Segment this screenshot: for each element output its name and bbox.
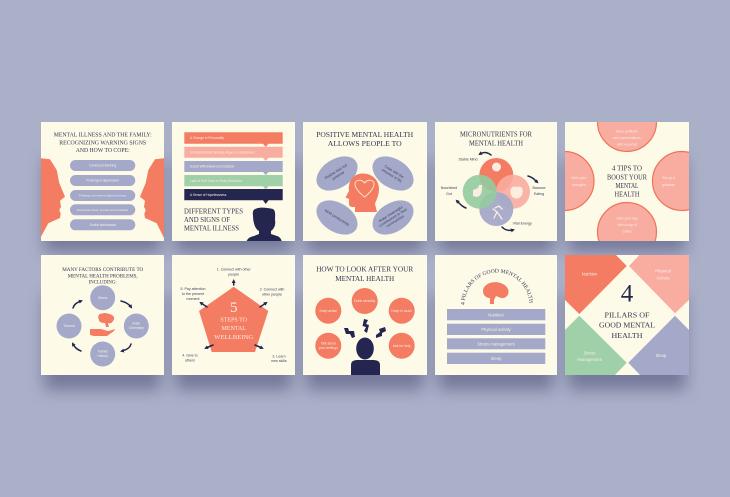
warning sign pills: Confused thinking xyxy=(89,164,116,168)
nutrient labels: Gut xyxy=(446,192,452,196)
tip text: coffee xyxy=(622,230,632,234)
ellipse: realise potential: Realise their full xyxy=(324,163,348,180)
factor circles xyxy=(56,285,149,366)
icon: brain xyxy=(492,162,501,172)
pillar bars: Nutrition xyxy=(488,312,504,317)
tip circles: Keep active xyxy=(319,309,337,313)
tip text: Start your day xyxy=(616,216,638,220)
ellipse: meaningful contributions: communities xyxy=(386,214,405,228)
tip circles: Ask for help xyxy=(393,344,411,348)
tip text: strengths xyxy=(572,183,586,187)
title xyxy=(460,132,532,148)
step labels: 2. Connect with xyxy=(260,288,284,292)
title xyxy=(316,130,414,148)
factor circles: Brain xyxy=(132,322,140,326)
tip text: Work your xyxy=(571,176,588,180)
pillar bars: Stress management xyxy=(477,342,516,346)
tip text: Set up a xyxy=(662,176,675,180)
tip text xyxy=(571,130,675,234)
factor circles: History xyxy=(97,354,108,358)
step labels: others xyxy=(185,358,195,362)
title: MENTAL HEALTH PROBLEMS, xyxy=(68,274,138,280)
ellipse: realise potential: potential xyxy=(332,170,345,181)
tip circles: Drink sensibly xyxy=(354,299,376,303)
title: HOW TO LOOK AFTER YOUR xyxy=(316,264,414,274)
title: RECOGNIZING WARNING SIGNS xyxy=(59,140,147,146)
quadrant labels: Stress xyxy=(584,350,595,356)
warning sign pills: Excessive fears, worries and anxieties xyxy=(77,208,129,212)
speech bars: A Change in Personality xyxy=(190,136,224,140)
pentagon heading: MENTAL xyxy=(221,326,246,332)
step labels: 5. Pay attention xyxy=(181,287,205,291)
panel: how to look after xyxy=(303,255,427,375)
warning sign pills: Prolonged depression xyxy=(86,179,119,183)
quadrant labels: Physical xyxy=(655,268,671,274)
icon: hand holding brain xyxy=(90,313,115,336)
quadrant: nutrition xyxy=(565,255,627,314)
nutrient labels: Vital Energy xyxy=(513,222,532,226)
big number: 4 xyxy=(621,280,634,308)
tip circles xyxy=(315,288,415,359)
title: HEALTH xyxy=(612,332,642,340)
title: DIFFERENT TYPES xyxy=(184,206,243,216)
speech bars: Social Withdrawal and Isolation xyxy=(190,165,235,169)
nutrient labels: Balance xyxy=(532,186,546,190)
icon: person with lightning bolts xyxy=(344,319,386,375)
title xyxy=(607,166,647,198)
step labels: 1. Connect with other xyxy=(217,268,251,272)
tip text: getaway xyxy=(662,183,675,187)
tip circles: Keep in touch xyxy=(391,309,412,313)
step labels xyxy=(181,268,287,363)
title: MENTAL HEALTH xyxy=(335,274,395,283)
step labels: new skills xyxy=(271,359,287,363)
icon: brain xyxy=(483,282,509,304)
quadrant: sleep xyxy=(628,316,689,375)
title: INCLUDING: xyxy=(89,280,117,286)
title: MANY FACTORS CONTRIBUTE TO xyxy=(62,267,143,273)
speech bars: Uncharacteristic Anxiety, Anger, or Moodiness xyxy=(190,150,255,154)
left face silhouette xyxy=(41,158,65,237)
ellipse: meaningful contributions: Make meaningful xyxy=(378,205,404,223)
panel: 4 pillars arch xyxy=(435,255,557,375)
ellipse: meaningful contributions: contributions to their xyxy=(378,207,409,228)
tip text: Have gratitude xyxy=(616,130,638,134)
factor circles: Family xyxy=(98,350,108,354)
title: MENTAL ILLNESS AND THE FAMILY: xyxy=(54,132,152,138)
icon: person silhouette xyxy=(247,208,282,241)
pentagon heading xyxy=(214,300,254,341)
quadrant labels xyxy=(577,268,671,362)
tip text: and conversations xyxy=(613,136,641,140)
title: MENTAL xyxy=(616,183,638,190)
tip text: with a cup of xyxy=(617,223,637,227)
title xyxy=(62,267,143,286)
warning sign pills: Feelings of extreme highs and lows xyxy=(79,194,127,198)
icon: runner xyxy=(493,206,502,219)
nutrient labels: Stable Mind xyxy=(459,158,477,162)
quadrant labels: Activity xyxy=(656,276,671,280)
quadrant labels: Management xyxy=(577,357,603,362)
title xyxy=(316,264,414,283)
venn circles xyxy=(463,158,530,226)
title: POSITIVE MENTAL HEALTH xyxy=(316,130,414,139)
step labels: people xyxy=(228,272,239,276)
pentagon heading: STEPS TO xyxy=(220,318,248,324)
tip circles: your feelings xyxy=(319,346,338,350)
ellipse: cope with stresses xyxy=(366,149,420,198)
tip circles xyxy=(565,122,689,241)
factor circles: Trauma xyxy=(63,324,75,328)
title: PILLARS OF xyxy=(604,312,650,320)
step labels: moment xyxy=(187,297,199,301)
ellipse: cope with stresses: Cope with the xyxy=(384,164,404,179)
title: BOOST YOUR xyxy=(607,174,647,182)
panel: different types and signs xyxy=(172,122,295,241)
icon: apple xyxy=(511,187,523,199)
title: MICRONUTRIENTS FOR xyxy=(460,132,532,138)
step labels: other people xyxy=(262,292,282,296)
tip circles: Talk about xyxy=(321,342,336,346)
factor circles: Stress xyxy=(98,296,108,300)
cycle arrows xyxy=(73,301,131,351)
panel: 4 pillars diamonds xyxy=(565,255,689,375)
title: MENTAL HEALTH xyxy=(469,140,523,148)
nutrient labels: Eating xyxy=(534,192,544,196)
step labels: to the present xyxy=(182,292,204,296)
nutrient labels: Nourished xyxy=(441,186,457,190)
title: 4 TIPS TO xyxy=(612,166,642,172)
nutrient labels xyxy=(441,158,546,226)
panel: many factors xyxy=(41,255,164,375)
panel: 4 tips xyxy=(565,122,689,241)
title: MENTAL ILLNESS xyxy=(184,224,239,232)
pentagon xyxy=(199,287,268,352)
step labels: 4. Give to xyxy=(182,354,198,358)
title: HEALTH xyxy=(614,192,640,198)
arched title: 4 PILLARS OF GOOD MENTAL HEALTH xyxy=(460,268,533,305)
icon: head with heart xyxy=(346,173,379,212)
pentagon heading: 5 xyxy=(230,300,237,316)
quadrant: stress management xyxy=(565,316,627,375)
tip text: with a journal xyxy=(617,142,637,146)
speech bars: A Sense of Hopelessness xyxy=(190,193,227,197)
pentagon heading: WELLBEING xyxy=(214,335,254,341)
quadrant labels: Nutrition xyxy=(582,272,598,276)
arrows around venn xyxy=(457,153,537,230)
title xyxy=(54,132,152,154)
right face silhouette xyxy=(140,158,164,238)
icon: stomach xyxy=(473,185,482,197)
pillar bars: Physical activity xyxy=(481,327,512,332)
speech bars: Lack of Self-Care or Risky Behaviour xyxy=(190,179,243,183)
step arrows xyxy=(201,281,266,348)
speech bars xyxy=(184,132,283,204)
title: ALLOWS PEOPLE TO xyxy=(328,139,402,148)
ellipse: realise potential xyxy=(310,149,364,198)
pillar bars xyxy=(447,309,545,364)
panel: 5 steps xyxy=(172,255,295,375)
title: GOOD MENTAL xyxy=(599,322,655,330)
pillar bars: Sleep xyxy=(491,356,502,361)
warning sign pills xyxy=(70,160,135,230)
title xyxy=(599,312,655,340)
quadrant: physical activity xyxy=(629,255,689,313)
warning sign pills: Social withdrawal xyxy=(90,223,116,227)
quadrant labels: Sleep xyxy=(656,353,667,358)
panel: mental illness and the family xyxy=(41,122,164,241)
panel: micronutrients xyxy=(435,122,557,241)
title xyxy=(184,206,243,232)
ellipse: cope with stresses: stresses of life xyxy=(381,168,402,183)
title: AND HOW TO COPE: xyxy=(76,147,130,154)
ellipse: work productively: Work productively xyxy=(324,208,350,227)
ellipse: meaningful contributions xyxy=(366,193,420,242)
panel: positive mental health xyxy=(303,122,427,242)
step labels: 3. Learn xyxy=(272,354,286,358)
title: AND SIGNS OF xyxy=(184,215,230,224)
factor circles: Chemistry xyxy=(129,326,144,330)
